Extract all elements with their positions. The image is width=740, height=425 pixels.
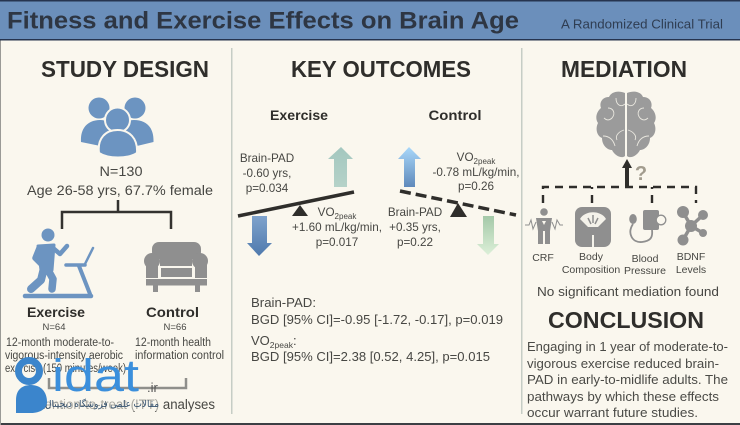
control brain-pad result: p=0.22 (397, 236, 433, 249)
panel: key outcomes (238, 56, 520, 364)
conclusion text: Engaging in 1 year of moderate-to- (527, 339, 728, 354)
exercise column label: Exercise (270, 107, 328, 123)
control description: information control (135, 350, 224, 362)
exercise description: exercise (150 minutes/week) (5, 363, 126, 375)
exercise brain-pad result: -0.60 yrs, (243, 167, 291, 180)
control brain-pad result: +0.35 yrs, (389, 221, 441, 234)
label: blood pressure: Blood (632, 253, 659, 265)
label: bdnf levels: BDNF (677, 251, 705, 263)
panel: study design (5, 56, 224, 412)
sample size: N=130 (100, 164, 142, 179)
control vo2 result: VO (457, 151, 474, 164)
control vo2 result: -0.78 mL/kg/min, (432, 166, 520, 179)
icon: cardiorespiratory fitness (525, 208, 563, 244)
label: body composition (562, 251, 620, 276)
control vo2 result: 2peak (474, 157, 496, 166)
control vo2 result: p=0.26 (458, 180, 494, 193)
watermark: idat logo: .ir (147, 380, 158, 395)
exercise vo2 result: 2peak (335, 212, 357, 221)
conclusion text: occur warrant future studies. (527, 405, 698, 420)
watermark: idat logo: idat (52, 350, 140, 401)
icon: blood pressure cuff (629, 210, 666, 242)
label: bdnf levels: Levels (676, 264, 706, 276)
icon: body composition scale (575, 207, 611, 247)
control balance beam (400, 191, 516, 217)
exercise vo2 result (292, 206, 382, 249)
title: Fitness and Exercise Effects on Brain Age (7, 8, 519, 34)
label: body composition: Composition (562, 264, 620, 276)
label: blood pressure: Pressure (624, 265, 666, 277)
heading: key outcomes: KEY OUTCOMES (291, 56, 471, 82)
subtitle: A Randomized Clinical Trial (561, 18, 723, 32)
label: bdnf levels (676, 251, 706, 276)
icon: group of people (81, 98, 154, 158)
between-group statistics (251, 295, 503, 364)
control description (135, 337, 224, 362)
conclusion text: PAD in early-to-midlife adults. The (527, 372, 728, 387)
exercise brain-pad result (240, 152, 294, 195)
question mark: ? (635, 163, 647, 185)
exercise balance beam (238, 192, 354, 216)
between-group statistics: BGD [95% CI]=-0.95 [-1.72, -0.17], p=0.019 (251, 312, 503, 327)
control vo2 result (432, 151, 520, 193)
dashed connector (543, 187, 696, 203)
control n: N=66 (164, 322, 186, 333)
control brain-pad result (388, 206, 442, 249)
control description: 12-month health (135, 337, 211, 349)
icon: treadmill runner (25, 228, 93, 296)
demographics: Age 26-58 yrs, 67.7% female (27, 183, 213, 198)
exercise vo2 result: p=0.017 (316, 236, 358, 249)
exercise description: vigorous-intensity aerobic (5, 350, 123, 362)
between-group statistics: 2peak (270, 340, 294, 350)
watermark: idat logo (16, 350, 159, 413)
header banner (0, 0, 740, 40)
exercise vo2 result: VO (318, 206, 335, 219)
arrow: vo2 down control (477, 216, 499, 255)
control arm label: Control (146, 304, 199, 320)
control brain-pad result: Brain-PAD (388, 206, 442, 219)
arrow: brain-pad down exercise (247, 216, 272, 256)
heading: mediation: MEDIATION (561, 56, 687, 82)
heading: study design: STUDY DESIGN (41, 56, 209, 82)
panel: conclusion (527, 307, 728, 420)
exercise n: N=64 (43, 322, 65, 333)
exercise arm label: Exercise (27, 304, 85, 320)
between-group statistics: BGD [95% CI]=2.38 [0.52, 4.25], p=0.015 (251, 349, 490, 364)
exercise brain-pad result: Brain-PAD (240, 152, 294, 165)
analysis label: Intention-to-treat (ITT) analyses (30, 397, 215, 412)
icon: brain (596, 92, 656, 157)
analysis bracket (49, 378, 186, 388)
control column label: Control (428, 107, 482, 123)
arrow: brain-pad up control (398, 147, 421, 187)
conclusion text: vigorous exercise reduced brain- (527, 356, 719, 371)
exercise description (5, 337, 126, 375)
mediation finding: No significant mediation found (537, 284, 719, 299)
exercise brain-pad result: p=0.034 (246, 182, 289, 195)
exercise description: 12-month moderate-to- (6, 337, 114, 349)
icon: bdnf molecule (677, 206, 708, 246)
randomization tree (62, 200, 171, 229)
exercise vo2 result: +1.60 mL/kg/min, (292, 221, 382, 234)
label: body composition: Body (579, 251, 604, 263)
conclusion text: pathways by which these effects (527, 389, 720, 404)
label: crf: CRF (532, 252, 554, 264)
panel: mediation (525, 56, 719, 299)
arrow: to brain (622, 159, 632, 187)
between-group statistics: : (293, 333, 297, 348)
heading: conclusion: CONCLUSION (548, 307, 704, 333)
between-group statistics: Brain-PAD: (251, 295, 316, 310)
label: blood pressure (624, 253, 666, 277)
conclusion text (527, 339, 728, 420)
between-group statistics: VO (251, 333, 270, 348)
icon: armchair (144, 242, 208, 292)
arrow: vo2 up exercise (328, 147, 353, 187)
watermark: idat logo: مقالات علمی فروشگاه دیجیتال (45, 398, 159, 410)
